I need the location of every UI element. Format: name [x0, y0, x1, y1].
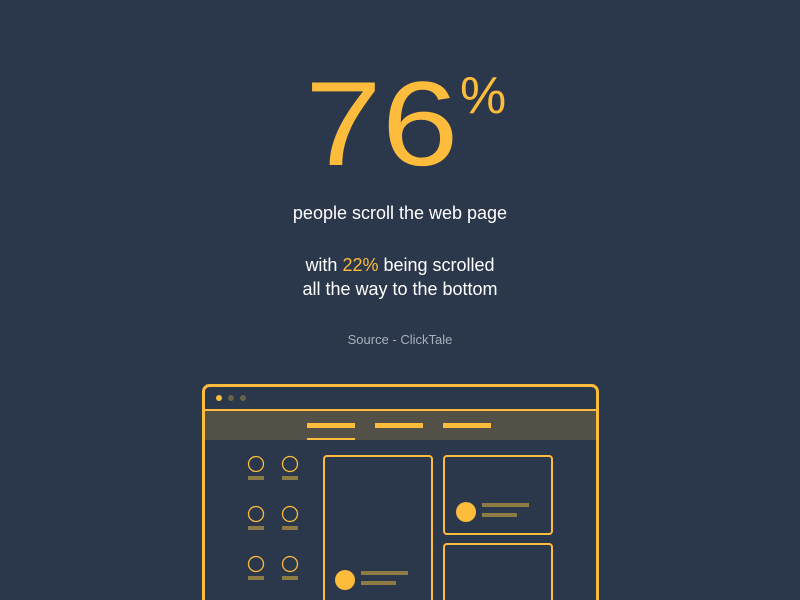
big stat: 76	[305, 57, 459, 191]
source: Source - ClickTale	[348, 332, 452, 347]
subtitle: people scroll the web page	[293, 203, 507, 223]
big stat: %	[460, 67, 506, 125]
detail text: with 22% being scrolled	[305, 255, 495, 275]
detail text	[302, 255, 498, 299]
detail text: all the way to the bottom	[302, 279, 498, 299]
